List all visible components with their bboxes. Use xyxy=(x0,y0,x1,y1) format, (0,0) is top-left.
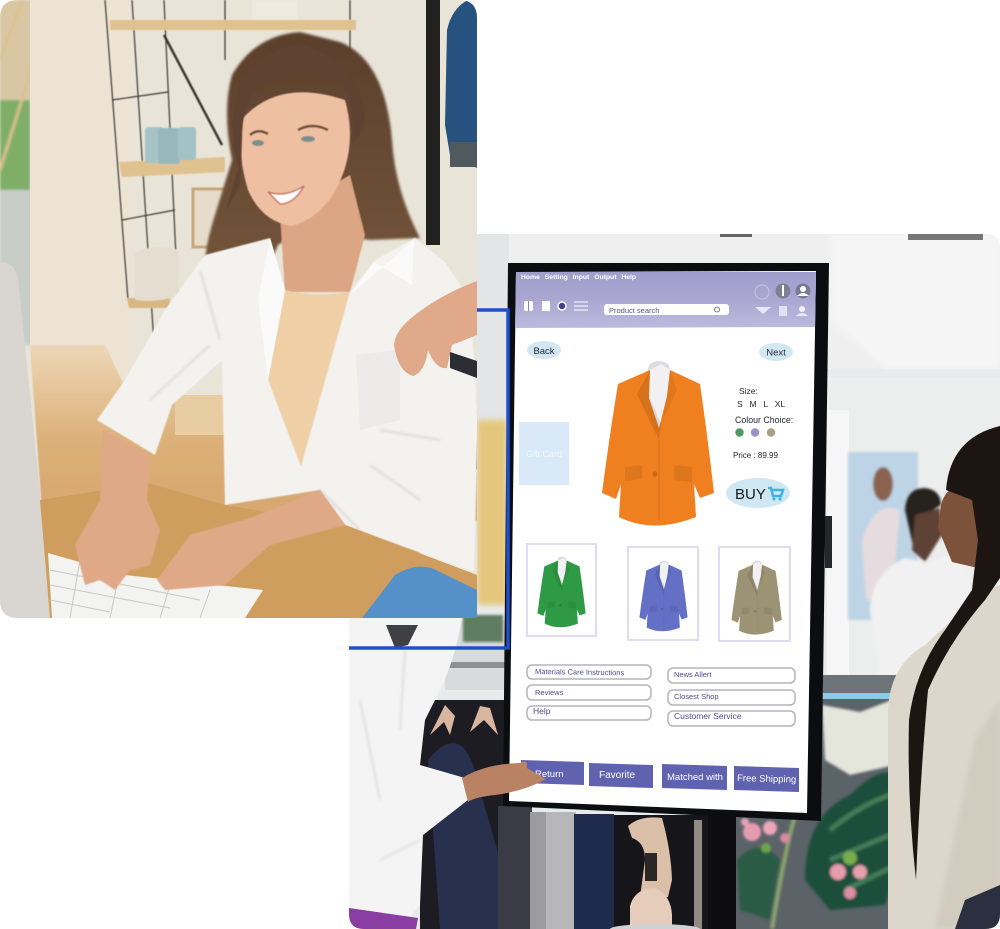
wooden desk xyxy=(40,483,477,618)
assistant in white shirt xyxy=(349,618,468,929)
gift card tile: Gift Card xyxy=(526,449,562,459)
woman's hair back xyxy=(204,32,420,336)
desktop monitor xyxy=(0,262,53,618)
thumbnail: khaki blazer xyxy=(719,547,790,641)
woman's hair front xyxy=(226,45,364,210)
product search box xyxy=(604,304,729,315)
right info links: Customer Service xyxy=(674,711,742,721)
back button xyxy=(527,341,561,359)
product options: Price : 89.99 xyxy=(733,451,778,460)
white shirt xyxy=(97,238,478,572)
plants and flowers xyxy=(737,700,898,929)
folded denim on desk xyxy=(362,567,477,618)
back button: Back xyxy=(533,346,555,357)
photo: woman shopping online at desk xyxy=(0,0,478,620)
woman's face xyxy=(240,92,350,226)
product options: Size: xyxy=(739,386,758,396)
matched with button: Matched with xyxy=(667,772,723,783)
orange blazer product image xyxy=(602,361,714,526)
right info links: News Allert xyxy=(674,670,712,679)
thumbnail: green blazer xyxy=(527,544,596,636)
neck and chest xyxy=(280,175,365,292)
foreground customer with braids xyxy=(888,426,1000,929)
hanging clothes rack xyxy=(420,615,734,929)
product options: Colour Choice: xyxy=(735,415,793,425)
right info links xyxy=(668,668,795,726)
matched with button xyxy=(662,764,727,790)
free shipping button xyxy=(734,766,799,792)
buy button xyxy=(726,478,790,508)
screen header bar xyxy=(515,272,816,328)
buy button: BUY xyxy=(735,486,766,503)
account icons xyxy=(755,284,810,316)
next button: Next xyxy=(766,348,786,358)
background salesman xyxy=(869,486,942,622)
wall poster xyxy=(848,452,918,620)
wooden floor xyxy=(30,344,477,553)
menu text: Home Setting Input Output Help xyxy=(521,274,636,281)
beige camisole xyxy=(268,290,350,466)
white keyboard xyxy=(48,553,263,618)
second person's pointing hand xyxy=(394,281,477,376)
smartphone xyxy=(450,352,477,378)
next button xyxy=(759,343,793,361)
high heel display xyxy=(610,817,700,929)
blue accent frame lines xyxy=(349,310,508,648)
back shelf and blue light strip xyxy=(735,675,908,929)
assistant pointing hand xyxy=(462,761,546,802)
thumbnail: blue blazer xyxy=(628,547,698,640)
return button: Return xyxy=(535,769,564,780)
left info links: Materials Care Instructions xyxy=(535,667,625,677)
kiosk stand pole xyxy=(708,815,736,929)
product search box: Product search xyxy=(609,306,659,315)
left info links xyxy=(527,665,651,720)
free shipping button: Free Shipping xyxy=(737,773,796,786)
gift card tile xyxy=(519,422,569,485)
kiosk screen xyxy=(509,271,816,813)
favorite button: Favorite xyxy=(599,770,636,781)
window and outdoor view xyxy=(0,0,30,346)
left info links: Reviews xyxy=(535,688,564,697)
freestanding kiosk monitor xyxy=(503,263,832,821)
store ceiling and back wall xyxy=(477,234,1000,678)
return button xyxy=(521,760,584,785)
photo: shopper at kiosk in clothing store xyxy=(349,234,1000,929)
right info links: Closest Shop xyxy=(674,692,719,701)
cream partition wall xyxy=(30,0,52,346)
favorite button xyxy=(589,763,653,788)
left info links: Help xyxy=(533,706,551,716)
clothes rail and hanging denim xyxy=(426,0,477,470)
product options: S M L XL xyxy=(737,399,785,409)
toolbar icons xyxy=(524,301,588,311)
wire shelving unit xyxy=(105,0,356,360)
woman's forearms and hands xyxy=(75,430,345,590)
product options xyxy=(733,386,793,460)
